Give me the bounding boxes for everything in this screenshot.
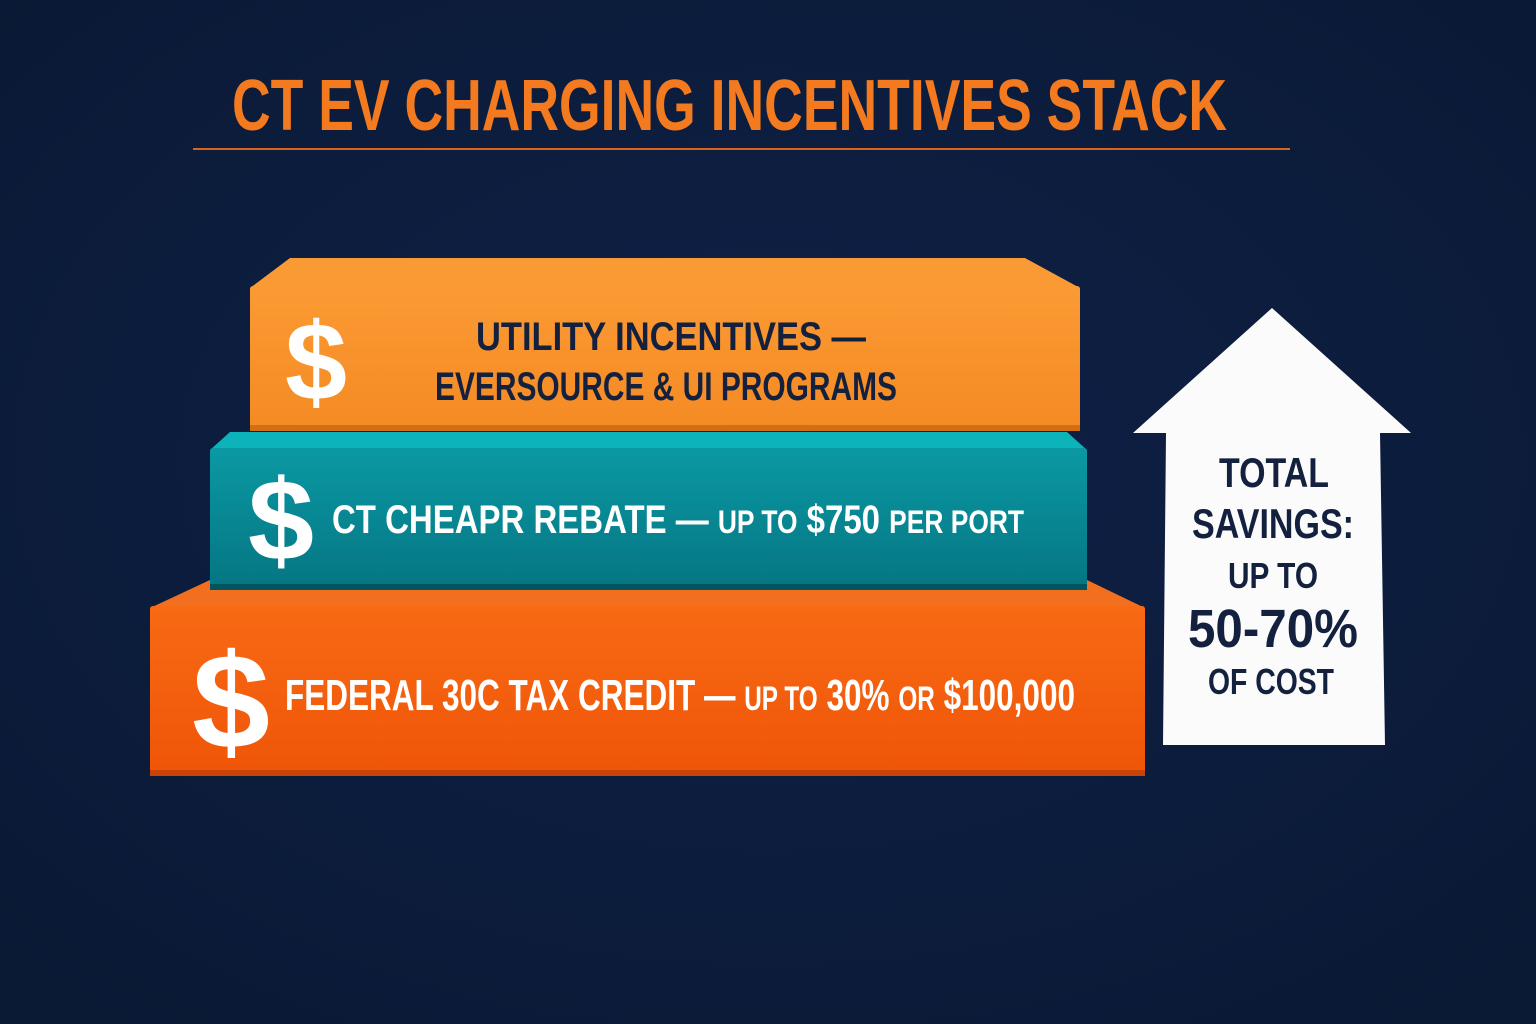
arrow: total savings: TOTAL xyxy=(1219,449,1329,496)
text: CHEAPR: CT CHEAPR REBATE — UP TO $750 PER PORT xyxy=(332,498,1024,542)
block: utility incentives: EVERSOURCE & UI PROGRAMS xyxy=(435,365,897,409)
text: federal credit: FEDERAL 30C TAX CREDIT — UP TO 30% OR $100,000 xyxy=(285,671,1075,720)
title: CT EV CHARGING INCENTIVES STACK xyxy=(232,66,1227,146)
block: CT CHEAPR rebate xyxy=(210,432,1087,590)
icon: dollar sign: $ xyxy=(285,301,347,424)
arrow: total savings: OF COST xyxy=(1208,661,1334,702)
icon: dollar sign: $ xyxy=(192,626,270,777)
arrow: total savings xyxy=(1133,308,1411,745)
arrow: total savings: 50-70% xyxy=(1188,599,1358,659)
block: federal 30C tax credit xyxy=(150,580,1145,777)
text: utility: UTILITY INCENTIVES — xyxy=(476,315,866,359)
icon: dollar sign: $ xyxy=(248,457,314,585)
block: utility incentives xyxy=(250,258,1080,431)
arrow: total savings: UP TO xyxy=(1228,555,1318,596)
arrow: total savings: SAVINGS: xyxy=(1192,500,1354,547)
